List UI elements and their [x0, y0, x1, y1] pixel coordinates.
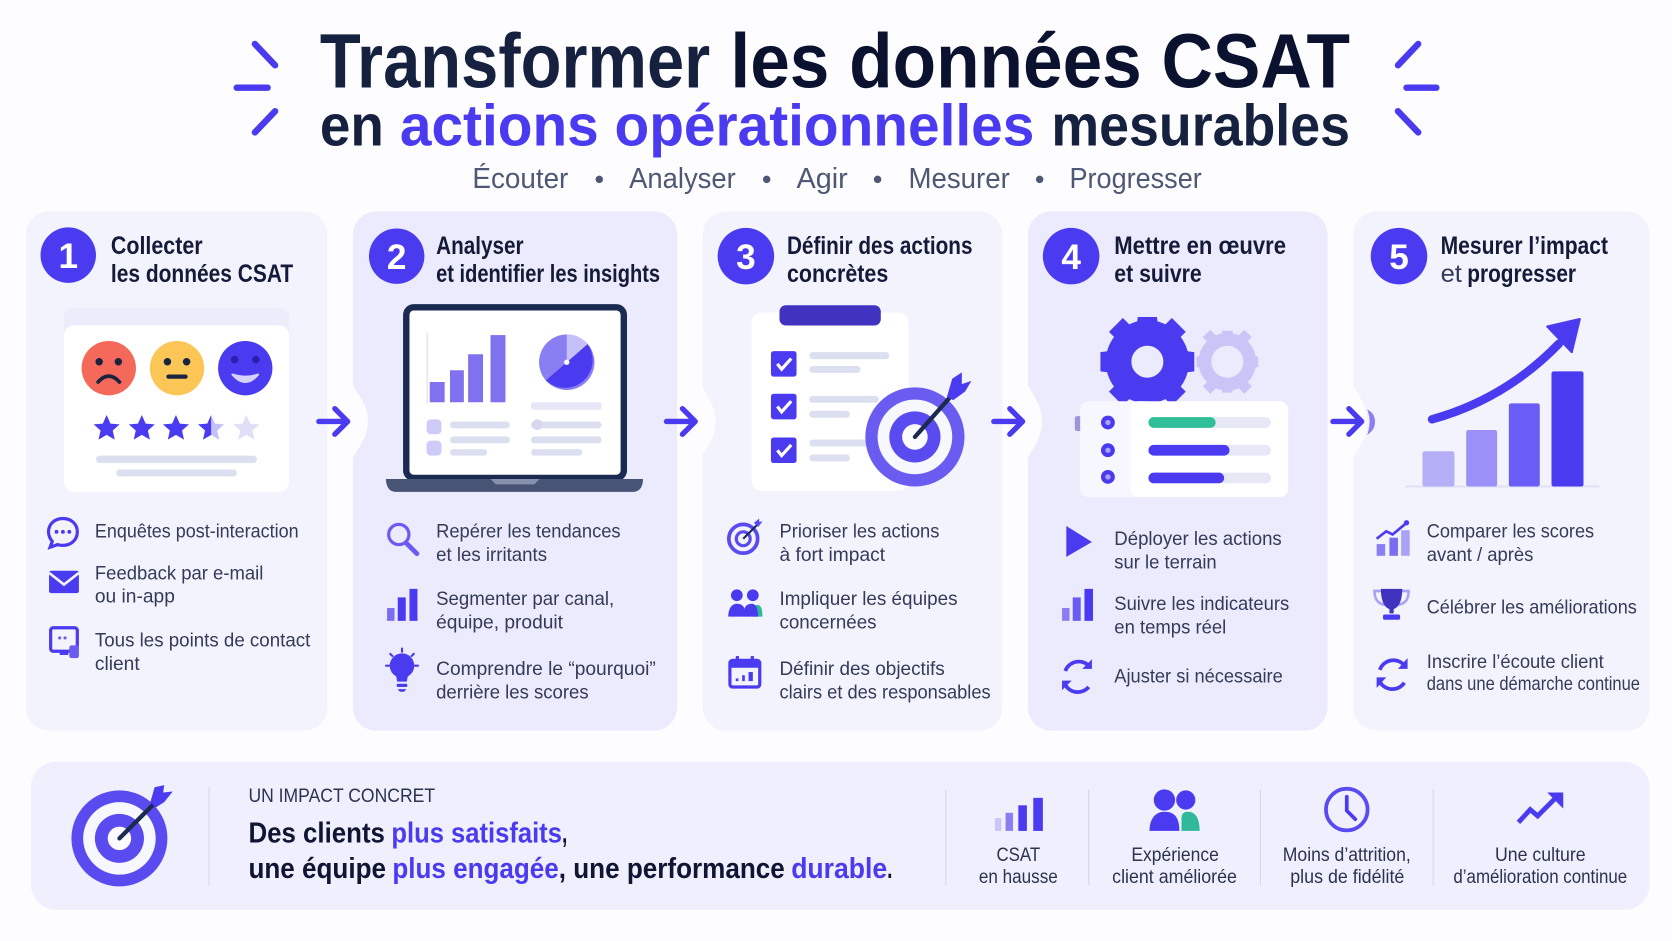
title: mesurables: [1051, 93, 1350, 158]
illustration: growth bars and arrow: [1405, 319, 1599, 488]
list item: feedback: Feedback par e-mail: [95, 562, 263, 584]
list item: enquêtes: Enquêtes post-interaction: [95, 521, 299, 543]
list item: points de contact: client: [95, 653, 140, 675]
illustration: gears and progress bars: [1075, 317, 1288, 497]
icon: people: [728, 589, 762, 617]
metric: attrition: plus de fidélité: [1290, 867, 1404, 888]
metric: attrition: Moins d’attrition,: [1283, 845, 1411, 866]
icon: trend arrow: [1518, 793, 1563, 822]
icon: mail: [49, 571, 79, 593]
step number 5: [1371, 228, 1427, 284]
subtitle: Progresser: [1070, 163, 1202, 195]
heading 1: les données CSAT: [111, 261, 293, 288]
list item: suivre: Suivre les indicateurs: [1114, 593, 1289, 615]
statement: ,: [562, 818, 567, 850]
list item: comparer: [1377, 520, 1594, 566]
statement: .: [887, 853, 893, 885]
list item: tendances: Repérer les tendances: [436, 521, 621, 543]
metric: csat en hausse: [979, 798, 1058, 888]
list item: pourquoi: Comprendre le “pourquoi”: [436, 658, 656, 680]
heading 4: [1114, 233, 1286, 288]
list item: tendances: [389, 521, 621, 566]
heading 5: Mesurer l’impact: [1441, 233, 1608, 260]
icon: chat bubble: [49, 518, 77, 547]
title: [320, 20, 1350, 158]
metric: expérience: [1112, 789, 1237, 888]
metric: culture: Une culture: [1495, 845, 1586, 866]
arrow 2 to 3: [666, 409, 695, 434]
list item: enquêtes: [49, 518, 299, 547]
list item: segmenter: équipe, produit: [436, 611, 564, 633]
statement: , une performance: [559, 853, 785, 885]
panel: step 4 mettre en oeuvre: [1025, 211, 1328, 731]
list item: impliquer: [728, 588, 958, 633]
list item: tendances: et les irritants: [436, 544, 547, 566]
icon: large target: [71, 785, 173, 886]
heading 5: progresser: [1467, 261, 1576, 288]
heading 4: et suivre: [1114, 261, 1202, 288]
icon: magnifier: [389, 524, 417, 554]
step number 3: 3: [736, 238, 756, 277]
list item: comparer: Comparer les scores: [1427, 521, 1594, 543]
icon: play: [1066, 526, 1092, 557]
step number 3: [718, 228, 774, 284]
icon: small target: [729, 518, 762, 553]
statement: plus satisfaits: [391, 818, 562, 850]
list item: segmenter: [387, 588, 614, 633]
list item: impliquer: Impliquer les équipes: [779, 588, 958, 610]
statement: une équipe: [248, 853, 386, 885]
heading 3: Définir des actions: [787, 233, 972, 260]
arrow 3 to 4: [994, 409, 1023, 434]
heading 3: [787, 233, 972, 288]
list item: feedback: [49, 562, 263, 608]
icon: clock: [1326, 789, 1368, 830]
list item: pourquoi: derrière les scores: [436, 682, 589, 704]
subtitle: Mesurer: [909, 163, 1010, 195]
icon: people: [1150, 789, 1200, 831]
icon: bulb: [386, 649, 418, 692]
step number 2: [369, 228, 424, 284]
list item: déployer: Déployer les actions: [1114, 528, 1282, 550]
panel: step 3 définir: [698, 211, 1002, 731]
metric: attrition: [1283, 789, 1411, 888]
subtitle: Écouter: [472, 162, 569, 195]
title: les données CSAT: [730, 20, 1350, 105]
heading 2: Analyser: [436, 233, 524, 260]
list item: ajuster: Ajuster si nécessaire: [1114, 666, 1283, 688]
icon: refresh: [1062, 659, 1092, 692]
label: un impact concret: UN IMPACT CONCRET: [248, 786, 435, 807]
illustration: laptop dashboard: [386, 307, 643, 492]
icon: cycle: [1377, 658, 1408, 689]
title: Transformer: [320, 20, 710, 105]
list item: objectifs: [729, 656, 991, 704]
heading 2: [436, 233, 660, 288]
illustration: checklist and target: [752, 305, 971, 491]
list item: objectifs: clairs et des responsables: [779, 682, 991, 704]
panel: step 2 analyser: [350, 211, 677, 731]
icon: device: [51, 628, 79, 658]
list item: célébrer: [1374, 589, 1637, 620]
decorative sparks left: [237, 44, 275, 132]
metric: expérience: client améliorée: [1112, 867, 1237, 888]
metric: expérience: Expérience: [1131, 845, 1219, 866]
metric: csat en hausse: en hausse: [979, 867, 1058, 888]
heading 1: Collecter: [111, 233, 203, 260]
list item: points de contact: [51, 628, 311, 675]
title: en: [320, 93, 384, 158]
step number 4: 4: [1061, 238, 1081, 277]
step number 1: [41, 227, 96, 283]
subtitle: [472, 162, 1202, 195]
metric: csat en hausse: CSAT: [996, 845, 1040, 866]
arrow 1 to 2: [319, 409, 348, 434]
list item: objectifs: Définir des objectifs: [779, 658, 945, 680]
list item: comparer: avant / après: [1427, 544, 1534, 566]
list item: feedback: ou in-app: [95, 586, 175, 608]
heading 4: Mettre en œuvre: [1114, 233, 1286, 260]
panel: impact band: [31, 762, 1650, 910]
panel: step 5 mesurer: [1350, 211, 1650, 731]
icon: bars: [1062, 589, 1093, 621]
heading 3: concrètes: [787, 261, 888, 288]
icon: calendar: [729, 656, 760, 687]
heading 5: et: [1441, 261, 1462, 288]
list item: ajuster: [1062, 659, 1283, 692]
list item: pourquoi: [386, 649, 656, 704]
statement: plus engagée: [392, 853, 559, 885]
icon: chart rising: [1377, 520, 1410, 556]
statement: [248, 818, 893, 885]
arrow 4 to 5: [1333, 409, 1362, 434]
decorative sparks right: [1398, 44, 1436, 132]
panel: step 1 collecter: [26, 211, 327, 731]
step number 1: 1: [58, 237, 78, 276]
subtitle: Analyser: [629, 163, 736, 195]
list item: déployer: sur le terrain: [1114, 552, 1217, 574]
list item: impliquer: concernées: [779, 611, 877, 633]
list item: déployer: [1066, 526, 1282, 574]
metric: culture: d’amélioration continue: [1453, 867, 1627, 888]
statement: durable: [791, 853, 887, 885]
subtitle: Agir: [797, 163, 848, 195]
icon: bars: [387, 589, 417, 621]
list item: prioriser: Prioriser les actions: [779, 521, 940, 543]
step number 4: [1043, 228, 1099, 284]
step number 5: 5: [1389, 238, 1409, 277]
illustration: survey card: [64, 307, 289, 492]
list item: prioriser: à fort impact: [779, 544, 886, 566]
list item: segmenter: Segmenter par canal,: [436, 588, 614, 610]
list item: suivre: [1062, 589, 1289, 639]
icon: trophy: [1374, 589, 1409, 620]
list item: célébrer: Célébrer les améliorations: [1427, 596, 1637, 618]
heading 2: et identifier les insights: [436, 261, 660, 288]
statement: Des clients: [248, 818, 385, 850]
list item: points de contact: Tous les points de contact: [95, 629, 311, 651]
metric: culture: [1453, 793, 1627, 888]
list item: suivre: en temps réel: [1114, 617, 1226, 639]
step number 2: 2: [387, 238, 406, 277]
list item: inscrire: Inscrire l’écoute client: [1427, 651, 1604, 673]
list item: inscrire: [1377, 651, 1640, 695]
heading 1: [111, 233, 293, 288]
list item: prioriser: [729, 518, 940, 566]
icon: rising bars: [995, 798, 1043, 831]
title: actions opérationnelles: [400, 93, 1034, 158]
heading 5: [1441, 233, 1608, 288]
